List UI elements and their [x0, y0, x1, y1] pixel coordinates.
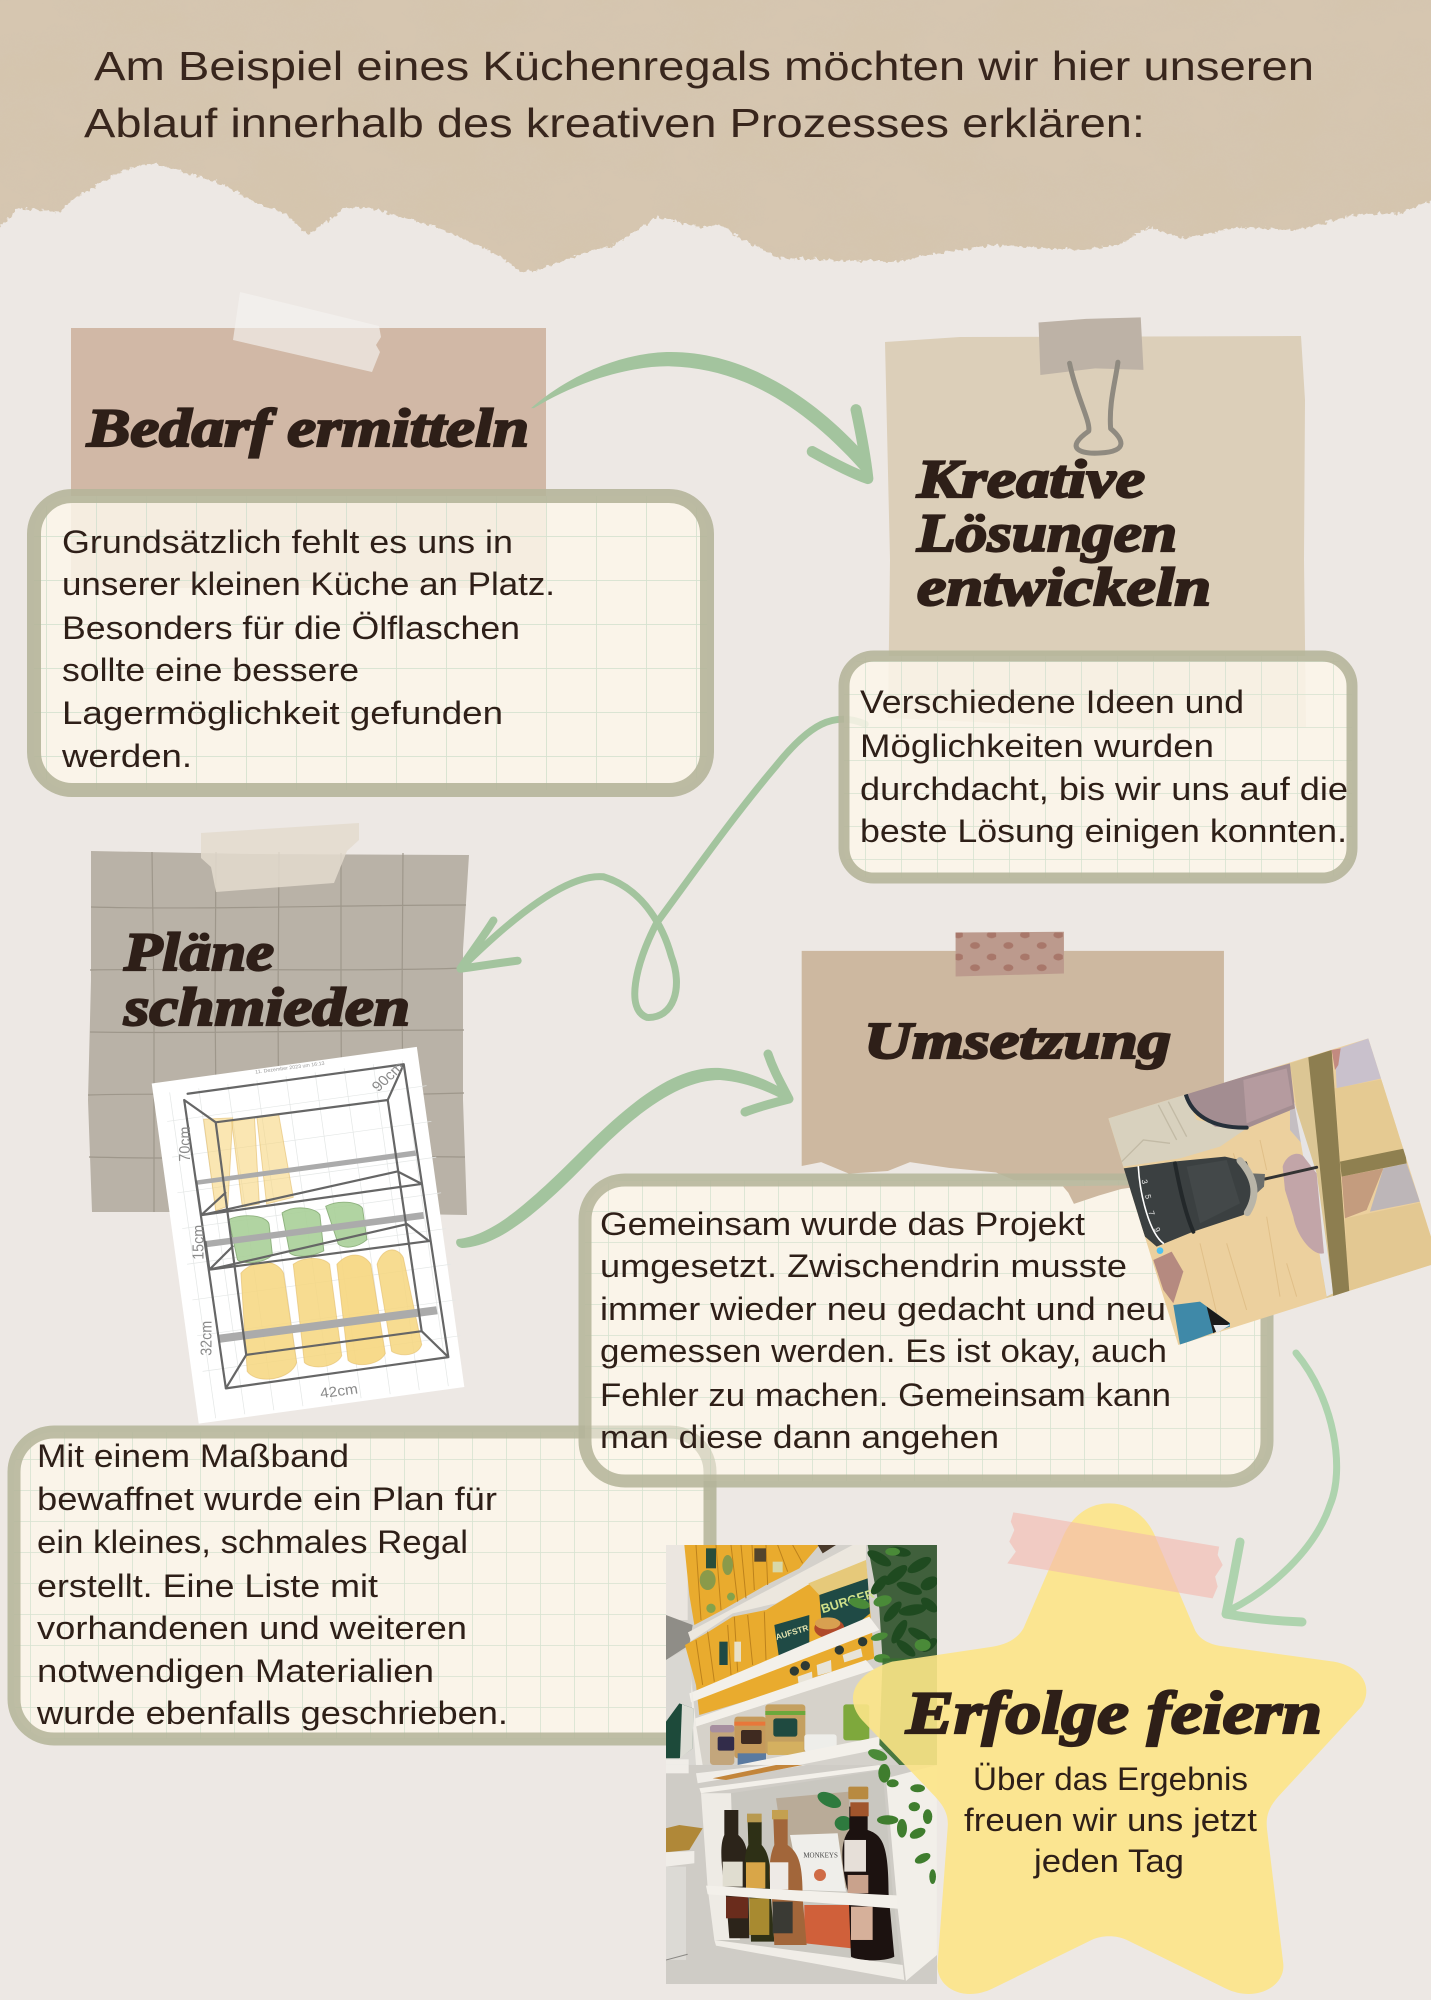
lower boards: [706, 1886, 901, 1909]
vertical plank: [1290, 1057, 1348, 1298]
top packets: [684, 1545, 819, 1625]
lower right lilac: [1370, 1163, 1420, 1212]
text: Mit einem Maßband: erstellt. Eine Liste mit: [37, 1568, 378, 1604]
sketch of shelf plan: 11. Dezember 2023 um 16:13: [255, 1061, 325, 1076]
hanging leaves: [877, 1764, 936, 1884]
dimensions: 32cm: [199, 1321, 215, 1356]
text: Über das Ergebnis: [964, 1761, 1257, 1879]
second row packets: [685, 1562, 874, 1715]
photo: drilling: [1100, 1030, 1431, 1350]
sweater: [1108, 1093, 1247, 1167]
wood right: [1335, 1079, 1405, 1162]
wall behind tins: [697, 1670, 872, 1726]
grid lines on note: [88, 852, 466, 1213]
text: Über das Ergebnis: jeden Tag: [1033, 1843, 1184, 1879]
note: Pläne schmieden: [88, 823, 469, 1215]
heading: Kreative Lösungen entwickeln: Lösungen: [916, 503, 1177, 563]
lower hand: [1153, 1252, 1183, 1303]
washi tape: [956, 932, 1064, 977]
text: Verschiedene Ideen: durchdacht, bis wir uns auf die: [860, 771, 1348, 807]
text: Gemeinsam wurde: Gemeinsam wurde das Projekt: [600, 1206, 1085, 1242]
dimensions: 15cm: [191, 1225, 208, 1260]
left book: [666, 1703, 693, 1758]
horizontal plank: [1340, 1148, 1407, 1177]
heading: Kreative Lösungen entwickeln: [916, 449, 1211, 617]
text: Mit einem Maßband: vorhandenen und weiteren: [37, 1610, 467, 1646]
text: Grundsätzlich: Besonders für die Ölflaschen: [62, 610, 520, 646]
photo: drilling: 9: [1152, 1226, 1162, 1234]
text: Grundsätzlich: [61, 524, 555, 774]
bottles: [721, 1810, 749, 1938]
carrot card: [804, 1905, 851, 1948]
front fingers: [1283, 1154, 1324, 1254]
drill bit: [1265, 1167, 1317, 1179]
floral card: [776, 1792, 851, 1888]
note tail over box: [1063, 1185, 1149, 1204]
lips: [689, 1617, 879, 1702]
heading: Pläne schmieden: Pläne: [123, 922, 274, 982]
lower part: [666, 1764, 937, 1985]
text: Gemeinsam wurde: [600, 1206, 1171, 1455]
heading: Kreative Lösungen entwickeln: entwickeln: [917, 557, 1211, 617]
gray shelf bars: [196, 1150, 438, 1343]
binder clip: [1039, 317, 1143, 453]
heading: Pläne schmieden: schmieden: [123, 977, 410, 1037]
note: Umsetzung: [802, 932, 1224, 1203]
background right: [1335, 1038, 1382, 1088]
text: Gemeinsam wurde: gemessen werden. Es ist okay, auch: [600, 1333, 1167, 1369]
arrow: Bedarf to Kreative: [531, 352, 868, 479]
note: Bedarf ermitteln: [71, 292, 546, 588]
back hand: [1342, 1168, 1383, 1218]
heading: Umsetzung: Umsetzung: [864, 1013, 1171, 1070]
text: Gemeinsam wurde: umgesetzt. Zwischendrin musste: [600, 1248, 1127, 1284]
labels below: [790, 1637, 867, 1676]
side posts: [691, 1678, 703, 1765]
text box: Gemeinsam wurde: [585, 1180, 1267, 1481]
text: Verschiedene Ideen: Verschiedene Ideen und: [860, 684, 1244, 720]
note: Kreative Lösungen: [885, 317, 1306, 730]
dimensions: 42cm: [319, 1382, 359, 1402]
upper wall: [666, 1545, 688, 1620]
upper hand: [1185, 1063, 1295, 1128]
upper shelf underside: [688, 1545, 866, 1641]
arrow: Umsetzung to Erfolge: [1226, 1353, 1337, 1622]
text: Mit einem Maßband: notwendigen Materialien: [37, 1653, 434, 1689]
photo: drilling: 3: [1140, 1179, 1149, 1185]
text box: Grundsätzlich: [34, 496, 707, 790]
text: Über das Ergebnis: freuen wir uns jetzt: [964, 1802, 1257, 1838]
monkeys card: [790, 1833, 846, 1892]
text: Mit einem Maßband: bewaffnet wurde ein Plan für: [37, 1481, 497, 1517]
plant: [868, 1545, 937, 1662]
arrow: Pläne to Umsetzung: [456, 1054, 790, 1248]
yellow oil bottles: [204, 1115, 422, 1379]
text: Mit einem Maßband: wurde ebenfalls geschrieben.: [36, 1695, 508, 1731]
lip 4: [738, 1737, 883, 1765]
heading: Bedarf ermitteln: Bedarf ermitteln: [86, 398, 529, 458]
text: Über das Ergebnis: Über das Ergebnis: [973, 1761, 1248, 1797]
burger pack: [808, 1560, 868, 1595]
title: Ablauf innerhalb des kreativen Prozesses erklären:: [84, 100, 1145, 146]
text: Mit einem Maßband: ein kleines, schmales Regal: [37, 1524, 468, 1560]
lower part: MONKEYS: [803, 1852, 838, 1860]
text: Gemeinsam wurde: Fehler zu machen. Gemeinsam kann: [600, 1377, 1171, 1413]
sketch of shelf plan: [152, 1047, 464, 1424]
text: Grundsätzlich: unserer kleinen Küche an Platz.: [62, 566, 555, 602]
shelf back: [716, 1770, 901, 1965]
tape: [201, 823, 359, 892]
tins: [710, 1704, 869, 1765]
battery: [1173, 1302, 1230, 1345]
dimensions: [178, 1060, 408, 1402]
text: Grundsätzlich: Grundsätzlich fehlt es uns in: [62, 524, 513, 560]
title: [84, 43, 1314, 146]
photo: finished shelf: BURGER: [819, 1587, 876, 1616]
heading: Pläne schmieden: [123, 922, 410, 1037]
photo: drilling: 5: [1143, 1194, 1153, 1200]
tape: [233, 292, 381, 372]
arrow: Kreative to Pläne: [460, 719, 865, 1017]
photo: finished shelf: AUFSTR: [774, 1622, 810, 1642]
pink tape: [1007, 1512, 1223, 1598]
heading: Kreative Lösungen entwickeln: Kreative: [916, 449, 1145, 509]
green packs: [229, 1202, 367, 1263]
photo: drilling: 7: [1146, 1210, 1156, 1217]
sketch grid: [167, 1060, 460, 1418]
dimensions: 70cm: [178, 1127, 194, 1162]
text: Grundsätzlich: sollte eine bessere: [62, 652, 359, 688]
text: Grundsätzlich: Lagermöglichkeit gefunden: [62, 695, 503, 731]
text: Verschiedene Ideen: Möglichkeiten wurden: [860, 728, 1214, 764]
text box: Verschiedene Ideen: [844, 656, 1352, 878]
floor grain: [1200, 1140, 1297, 1313]
star: [853, 1503, 1366, 1994]
drill: [1123, 1157, 1257, 1247]
text: Mit einem Maßband: [36, 1438, 508, 1731]
torn paper header: [0, 0, 1431, 272]
text: Gemeinsam wurde: man diese dann angehen: [600, 1419, 999, 1455]
text: Gemeinsam wurde: immer wieder neu gedacht und neu: [600, 1291, 1166, 1327]
title: Am Beispiel eines Küchenregals möchten wir hier unseren: [94, 43, 1314, 89]
text box: Mit einem Maßband: [14, 1432, 710, 1739]
photo: finished shelf: [666, 1545, 940, 1985]
text: Verschiedene Ideen: beste Lösung einigen konnten.: [860, 813, 1347, 849]
dimensions: 90cm: [369, 1060, 408, 1095]
heading: Erfolge feiern: Erfolge feiern: [905, 1680, 1322, 1746]
text: Verschiedene Ideen: [860, 684, 1348, 849]
text: Grundsätzlich: werden.: [61, 738, 192, 774]
text: Mit einem Maßband: Mit einem Maßband: [37, 1438, 349, 1474]
frame lines: [184, 1064, 448, 1388]
aufstrich pack: [774, 1615, 809, 1660]
